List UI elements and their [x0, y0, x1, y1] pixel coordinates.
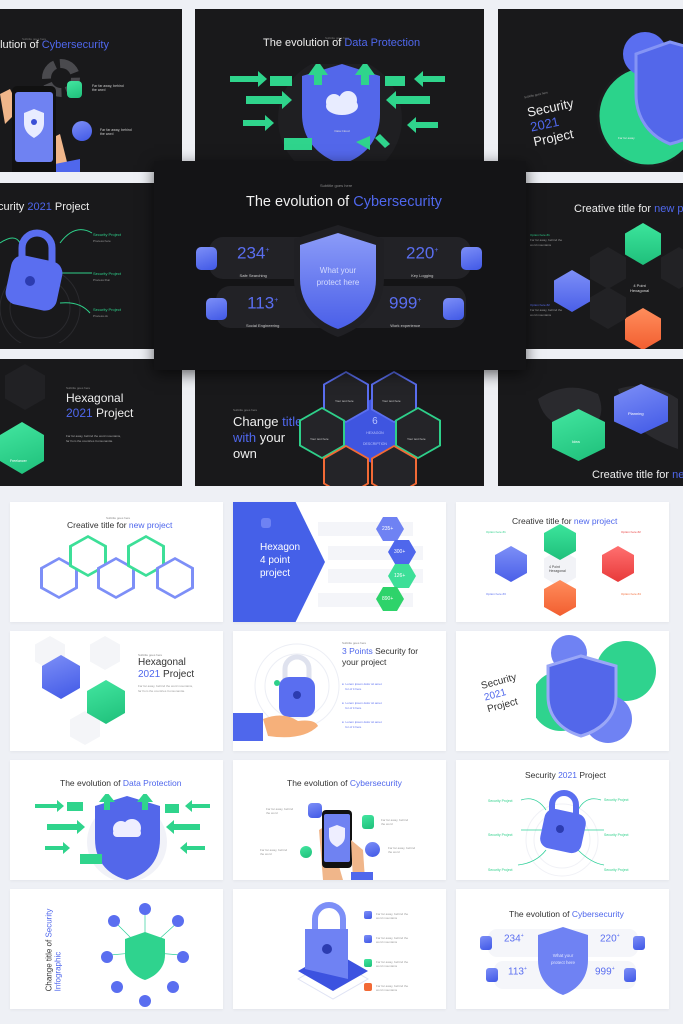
icon: phone in hand: [319, 810, 373, 880]
heading: Change title: [233, 414, 302, 429]
rotated title: Security: [526, 95, 575, 120]
panel: dark slide evolution of cybersecurity (top-left): [0, 9, 182, 172]
circle graphics: Far far away: [618, 136, 635, 140]
icons: [308, 803, 322, 818]
center text: HEXAGON: [366, 431, 384, 435]
panel: dark slide hexagonal 2021 project (row3 left): Freelancer: [10, 459, 27, 463]
rotated title: 2021: [529, 114, 560, 135]
bullets: ● Lorem ipsum dolor sit amet: [342, 682, 382, 686]
panel: light slide 3 points security: for of it here: [345, 706, 361, 710]
hexagons: [40, 557, 78, 599]
rotated title: Project: [486, 696, 519, 715]
panel: light slide isometric lock: Far far away, behind the: [376, 936, 408, 940]
panel: light slide data protection: [10, 760, 223, 880]
panel: dark slide security 2021 project lock (row2 left): Security Project: [93, 271, 121, 276]
heading: 2021 Project: [66, 406, 133, 420]
hexes: [544, 555, 576, 583]
text block: Far far away, behind: [100, 128, 132, 132]
shield: protect here: [317, 278, 360, 287]
heading: [138, 657, 194, 680]
subtitle: Subtitle goes here: [66, 386, 90, 390]
panel: dark slide change title hex (row3 middle): Your text here: [310, 437, 329, 441]
panel: dark slide creative title hexagons (row2 right): Far far away, behind the: [530, 308, 562, 312]
shield: What your: [553, 953, 574, 958]
panel: light slide hexagonal 2021 project: far from the countries Consonantia.: [138, 689, 185, 693]
heading: Hexagonal: [66, 391, 123, 405]
center text: [363, 416, 387, 446]
panel: light slide hexagon 4 point project: 300+: [394, 549, 405, 555]
panel: light slide 4 point hexagonal: Option here #4: [621, 592, 641, 596]
labels: [93, 232, 121, 243]
panel: light slide evolution of cybersecurity stats: [456, 889, 669, 1009]
panel: light slide phone cybersecurity: the word: [266, 811, 278, 815]
panel: light slide isometric lock: word mountains: [376, 964, 397, 968]
center text: DESCRIPTION: [363, 442, 387, 446]
hex cluster: [625, 223, 661, 265]
bullets: [342, 682, 382, 691]
icon: green hexagon: [0, 422, 44, 474]
stat 220: Key Logging: [411, 273, 433, 278]
subtitle: Subtitle goes here: [233, 408, 257, 412]
center text: [630, 283, 649, 293]
text block: the word: [100, 132, 113, 136]
text items: word mountains: [530, 243, 551, 247]
panel: light slide hexagonal 2021 project: Far far away, behind the word mountains,: [138, 684, 193, 688]
panel: light slide 4 point hexagonal: 4 Point: [549, 565, 560, 569]
panel: light slide isometric lock: word mountains: [376, 940, 397, 944]
panel: dark slide creative title hexagons (row2 right): Option here #2: [530, 303, 550, 307]
world map silhouette: [538, 386, 678, 449]
panel: light slide security 2021 lock: Security Project: [604, 868, 629, 872]
shield with arrows: Data Cloud: [334, 129, 350, 133]
shield: What your: [320, 266, 357, 275]
icon: gear: [42, 59, 80, 97]
panel: light slide 4 point hexagonal: Option here #2: [621, 530, 641, 534]
heading: own: [233, 446, 257, 461]
text items: Far far away, behind the: [530, 238, 562, 242]
panel: light slide hexagonal 2021 project: Subtitle goes here: [138, 653, 162, 657]
panel: light slide 4 point hexagonal: Hexagonal: [549, 569, 566, 573]
icon: blue hex: [42, 655, 80, 699]
panel: light slide phone cybersecurity: Far far away, behind: [381, 818, 408, 822]
text items: [530, 233, 562, 247]
panel: light slide security 2021 lock: Security Project: [488, 833, 513, 837]
rotated title: Project: [532, 126, 575, 149]
icon: green hex: [87, 680, 125, 724]
panel: dark slide security 2021 project lock (row2 left): Security Project: [93, 307, 121, 312]
panel: dark slide change title hex (row3 middle): [195, 359, 484, 486]
panel: dark slide creative title hexagons (row2 right): word mountains: [530, 313, 551, 317]
panel: dark slide map (row3 right): [498, 359, 683, 486]
icon: padlock with lines: [0, 229, 92, 343]
center text: 6: [372, 416, 378, 427]
circles and shield: [536, 635, 656, 743]
heading: [66, 391, 134, 420]
stat pills: [209, 237, 471, 279]
panel: light slide phone cybersecurity: the word: [260, 852, 272, 856]
panel: dark slide map (row3 right): Idea: [572, 439, 580, 444]
stat 999: 999+: [389, 294, 421, 313]
panel: light slide phone cybersecurity: the word: [388, 850, 400, 854]
stat 113: 113+: [247, 294, 278, 313]
panel: light slide isometric lock: Far far away, behind the: [376, 912, 408, 916]
heading: Creative title for new p: [574, 203, 683, 215]
panel: light slide security 2021 lock: Security Project: [604, 798, 629, 802]
blue arrow panel: [233, 502, 325, 622]
rotated title: Security: [480, 672, 518, 692]
icon: phone in hand: [0, 86, 80, 172]
vertical heading: [44, 909, 62, 991]
shield: protect here: [551, 960, 576, 965]
stat 113: Social Engineering: [246, 323, 279, 328]
panel: dark slide change title hex (row3 middle): Your text here: [335, 399, 354, 403]
labels: Security Project: [93, 232, 121, 237]
panel: dark slide creative title hexagons (row2 right): [526, 183, 683, 349]
ring diagram: [90, 897, 200, 1007]
panel: light slide creative title hexagons: [10, 502, 223, 622]
center text: 4 Point: [633, 283, 646, 288]
panel: dark slide map (row3 right): Planning: [628, 411, 644, 416]
panel: light slide 3 points security: ● Lorem ipsum dolor sit amet: [342, 720, 382, 724]
heading: with your: [233, 430, 285, 445]
heading: The evolution of Data Protection: [60, 778, 181, 788]
panel: light slide phone cybersecurity: Far far away, behind: [388, 846, 415, 850]
text: [66, 434, 121, 443]
panel: light slide security infographic ring: [10, 889, 223, 1009]
heading: curity 2021 Project: [0, 201, 89, 213]
pills: [488, 929, 638, 957]
panel: light slide security 2021 circles: [456, 631, 669, 751]
list rows with badges: [318, 522, 413, 536]
shield with arrows: [230, 64, 445, 161]
text: Far far away, behind the word mountains,: [66, 434, 121, 438]
stat 113: [246, 294, 280, 328]
panel: dark slide security 2021 project (top-right): [498, 9, 683, 172]
panel: light slide hexagonal 2021 project: [10, 631, 223, 751]
panel: light slide phone cybersecurity: Far far away, behind: [266, 807, 293, 811]
stat 999: [389, 294, 422, 328]
heading: project: [260, 568, 290, 579]
rotated title: [524, 90, 575, 149]
heading: Creative title for new project: [512, 516, 617, 526]
heading: The evolution of Cybersecurity: [509, 909, 624, 919]
stat 234: Safe Searching: [240, 273, 267, 278]
panel: light slide 4 point hexagonal: [456, 502, 669, 622]
icons: [480, 936, 492, 950]
heading: 4 point: [260, 555, 290, 566]
stat 220: [406, 244, 438, 278]
stat 999: Work experience: [390, 323, 420, 328]
icon: globe: [196, 247, 217, 270]
stats: 234+: [504, 933, 524, 944]
text: far from the countries Consonantia.: [66, 439, 113, 443]
heading: The evolution of Data Protection: [263, 37, 420, 49]
panel: dark slide security 2021 project lock (row2 left): [0, 183, 182, 349]
heading: Creative title for ne: [592, 469, 683, 481]
icon: blue circle: [72, 121, 92, 141]
text block: [92, 84, 124, 92]
text items: Option here #1: [530, 233, 550, 237]
icon: lock in hand: [233, 644, 340, 741]
rotated title: 2021: [483, 687, 507, 704]
6 hexagon diagram: [345, 399, 395, 463]
stat 234: [237, 244, 270, 278]
icon: thumbs up: [443, 298, 464, 320]
panel: light slide security 2021 lock: [456, 760, 669, 880]
heading: The evolution of Cybersecurity: [246, 194, 442, 210]
panel: featured center slide evolution of cybersecurity: [154, 161, 526, 370]
heading: 2021 Project: [138, 669, 194, 680]
panel: dark slide data protection (top-middle): [195, 9, 484, 172]
text block: the word: [92, 88, 105, 92]
panel: light slide isometric lock: word mountains: [376, 916, 397, 920]
heading: your project: [342, 657, 386, 667]
vertical heading: Infographic: [53, 952, 62, 991]
text block: [100, 128, 132, 136]
heading: 3 Points Security for: [342, 646, 418, 656]
panel: light slide phone cybersecurity: Far far away, behind: [260, 848, 287, 852]
panel: light slide evolution of cybersecurity stats: 113+: [508, 966, 527, 977]
subtitle: Subtitle goes here: [325, 36, 349, 40]
heading: Hexagon: [260, 542, 300, 553]
panel: dark slide change title hex (row3 middle): Your text here: [407, 437, 426, 441]
panel: light slide security 2021 lock: Security Project: [604, 833, 629, 837]
subtitle: Subtitle goes here: [320, 183, 352, 188]
panel: light slide 3 points security: [233, 631, 446, 751]
subtitle: Subtitle goes here: [22, 37, 46, 41]
stat 220: 220+: [406, 244, 438, 263]
heading: [233, 414, 302, 461]
icon: video: [206, 298, 227, 320]
bullets: for of it here: [345, 687, 361, 691]
panel: light slide phone cybersecurity: the word: [381, 822, 393, 826]
panel: light slide hexagon 4 point project: 235+: [382, 526, 393, 532]
panel: light slide isometric lock: Far far away, behind the: [376, 960, 408, 964]
labels: Process here: [93, 239, 111, 243]
panel: dark slide hexagonal 2021 project (row3 left): [0, 359, 182, 486]
stat 234: 234+: [237, 244, 269, 263]
panel: dark slide change title hex (row3 middle): Your text here: [382, 399, 401, 403]
shield: [294, 225, 384, 337]
list items: [364, 911, 372, 919]
panel: light slide security 2021 lock: Security Project: [488, 868, 513, 872]
heading: [260, 542, 300, 579]
panel: light slide evolution of cybersecurity stats: 220+: [600, 933, 620, 944]
icon: settings: [461, 247, 482, 270]
panel: light slide isometric lock: [233, 889, 446, 1009]
panel: light slide isometric lock: word mountains: [376, 988, 397, 992]
rotated title: [480, 672, 519, 715]
heading: Hexagonal: [138, 657, 186, 668]
panel: light slide phone cybersecurity: [233, 760, 446, 880]
center text: Hexagonal: [630, 288, 649, 293]
icon: green square: [67, 81, 82, 98]
icon: green idea hex: [552, 409, 605, 461]
circle graphics: [600, 32, 683, 164]
panel: light slide evolution of cybersecurity stats: 999+: [595, 966, 615, 977]
panel: light slide security 2021 lock: Security Project: [488, 799, 513, 803]
icon: padlock with connectors: [456, 785, 669, 880]
panel: light slide hexagon 4 point project: 126+: [394, 573, 405, 579]
text block: Far far away, behind: [92, 84, 124, 88]
panel: light slide 3 points security: ● Lorem ipsum dolor sit amet: [342, 701, 382, 705]
heading: Security 2021 Project: [525, 770, 606, 780]
panel: light slide hexagon 4 point project: 890+: [382, 596, 393, 602]
heading: [342, 646, 418, 667]
panel: light slide 3 points security: for of it here: [345, 725, 361, 729]
background hexes: [5, 364, 45, 410]
panel: light slide 3 points security: Subtitle goes here: [342, 641, 366, 645]
panel: dark slide hidden (row2 middle): [195, 183, 484, 349]
panel: light slide 4 point hexagonal: Option here #3: [486, 592, 506, 596]
heading: The evolution of Cybersecurity: [287, 778, 402, 788]
panel: dark slide security 2021 project lock (row2 left): Process ok: [93, 314, 108, 318]
icon: isometric padlock: [293, 899, 373, 1004]
rotated title: Subtitle goes here: [524, 90, 548, 99]
heading: Creative title for new project: [67, 520, 172, 530]
panel: light slide hexagon 4 point project: [233, 502, 446, 622]
shield: [536, 925, 590, 997]
shield with arrows: [35, 794, 210, 880]
panel: light slide isometric lock: Far far away, behind the: [376, 984, 408, 988]
vertical heading: Change title of Security: [44, 909, 53, 991]
option texts: Option here #1: [486, 530, 506, 534]
panel: dark slide security 2021 project lock (row2 left): Process Run: [93, 278, 110, 282]
icon: blue planning hex: [614, 384, 668, 434]
panel: light slide creative title hexagons: Subtitle goes here: [106, 516, 130, 520]
